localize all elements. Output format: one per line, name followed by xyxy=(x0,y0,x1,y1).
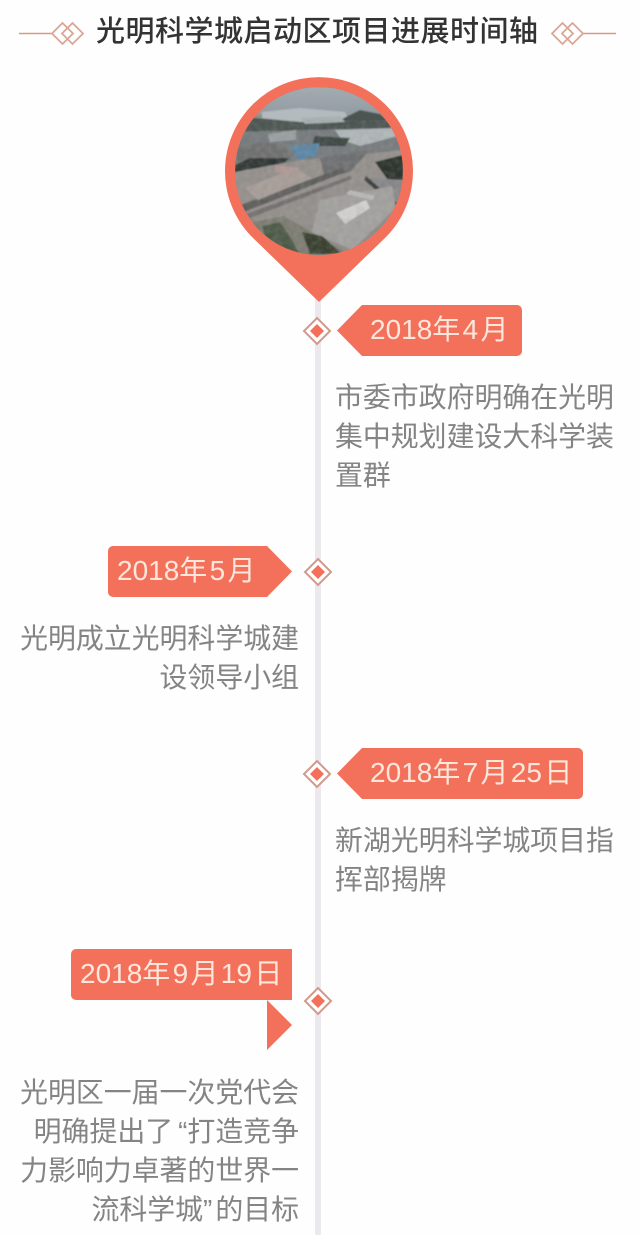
event 4: description: 光明区一届一次党代会 xyxy=(20,1077,299,1108)
event 2: description: 设领导小组 xyxy=(160,662,299,693)
event 2: node xyxy=(304,558,332,586)
event 1: description: 集中规划建设大科学装 xyxy=(335,421,614,452)
event 3: date label xyxy=(337,748,583,799)
event 3: date label: 2018年7月25日 xyxy=(370,757,572,788)
event 1: date label xyxy=(337,305,522,356)
event 2: description xyxy=(20,623,299,693)
event 4: description xyxy=(20,1077,299,1225)
event 4: date label xyxy=(71,949,292,1050)
event 4: description: 明确提出了“打造竞争 xyxy=(34,1116,299,1147)
event 1: description: 置群 xyxy=(335,460,391,491)
event 3: node xyxy=(302,760,332,788)
event 4: node xyxy=(304,986,332,1016)
event 4: description: 流科学城”的目标 xyxy=(91,1194,299,1225)
event 2: date label: 2018年5月 xyxy=(117,555,255,586)
pin shape xyxy=(225,77,413,302)
event 3: description: 挥部揭牌 xyxy=(335,864,447,895)
event 1: node xyxy=(302,316,332,346)
event 1: description: 市委市政府明确在光明 xyxy=(335,382,614,413)
event 3: description xyxy=(335,825,614,895)
event 1: date label: 2018年4月 xyxy=(370,314,508,345)
event 2: date label xyxy=(108,546,292,597)
event 4: date label: 2018年9月19日 xyxy=(80,958,282,989)
title ornament: left xyxy=(19,22,84,46)
event 4: description: 力影响力卓著的世界一 xyxy=(20,1155,299,1186)
heading: 光明科学城启动区项目进展时间轴 xyxy=(96,16,539,48)
event 1: description xyxy=(335,382,614,491)
map pin with aerial photo xyxy=(225,77,413,302)
event 3: description: 新湖光明科学城项目指 xyxy=(335,825,614,856)
timeline axis xyxy=(315,296,321,1235)
aerial photo xyxy=(235,87,403,255)
event 2: description: 光明成立光明科学城建 xyxy=(20,623,299,654)
title ornament: right xyxy=(550,22,616,46)
